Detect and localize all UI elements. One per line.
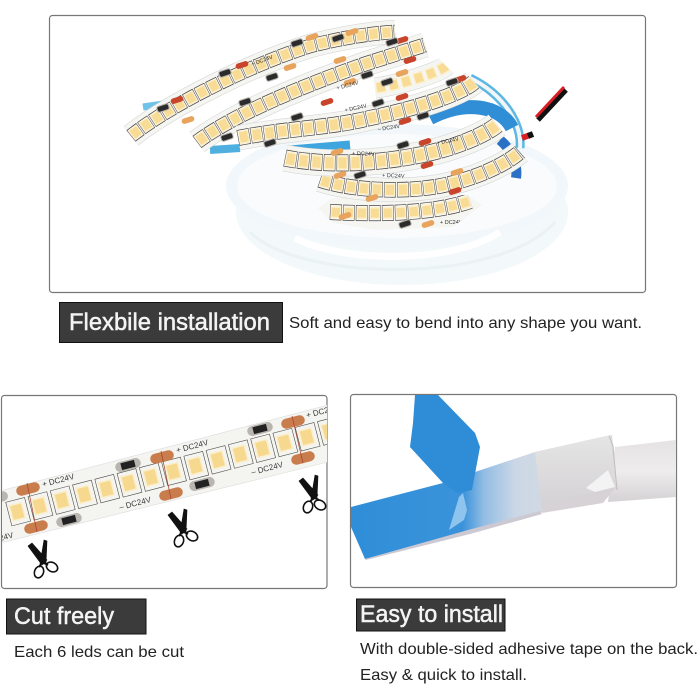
text: adhesive tape description xyxy=(360,641,698,684)
panel: LED strip reel photo xyxy=(50,16,646,292)
sleeve: clear protective wrap xyxy=(535,435,617,513)
strip: middle coil xyxy=(285,125,497,163)
strip: back coil xyxy=(375,66,446,88)
voltage labels: + DC24V xyxy=(175,438,210,455)
heading: Cut freely xyxy=(6,599,146,634)
tube: white strip right end xyxy=(608,440,676,502)
icon: scissors middle xyxy=(168,509,199,548)
voltage labels: – DC24V xyxy=(250,460,285,477)
strip: inner coil on the reel: + DC24V xyxy=(440,220,463,226)
solder pads and resistors on the reel strips: – DC24V xyxy=(377,124,401,133)
tape: strip with blue backing fading to white xyxy=(351,435,617,559)
solder pads and resistors on the reel strips: + DC24V xyxy=(352,151,375,158)
panel: cut freely photo xyxy=(0,396,340,588)
strip: lower coil xyxy=(320,152,520,190)
text: adhesive tape description: Easy & quick to install. xyxy=(360,667,527,684)
voltage labels: + DC24V xyxy=(305,403,340,420)
strip: second coil xyxy=(197,45,425,142)
solder pads and resistors on the reel strips: + DC24V xyxy=(336,80,360,92)
text: cut freely description: Each 6 leds can be cut xyxy=(14,644,185,661)
icon: scissors left xyxy=(28,540,59,579)
voltage labels: – DC24V xyxy=(118,495,153,512)
icon: scissors right xyxy=(299,475,327,514)
heading: Cut freely: Cut freely xyxy=(14,603,114,630)
strip: straight LED strip xyxy=(0,403,340,543)
solder pads and resistors on the reel strips: + DC24V xyxy=(382,173,405,180)
solder pads and resistors on the reel strips: + DC24V xyxy=(251,54,274,68)
tape: peeled blue flap xyxy=(410,395,480,530)
reel: translucent spool xyxy=(226,124,568,285)
strip: front coil xyxy=(238,82,474,138)
wires: red and black power leads xyxy=(522,87,566,138)
heading: Flexbile installation: Flexbile installation xyxy=(69,309,270,336)
cut lines xyxy=(27,416,303,532)
text: adhesive tape description: With double-sided adhesive tape on the back. xyxy=(360,641,698,658)
resistors xyxy=(0,421,274,528)
solder pads and resistors on the reel strips xyxy=(156,27,467,203)
voltage labels xyxy=(0,403,340,543)
blue backing loop xyxy=(143,78,520,178)
strip: top coil xyxy=(131,32,395,136)
solder pads and resistors on the reel strips: + DC24V xyxy=(344,103,368,114)
voltage labels: + DC24V xyxy=(41,472,76,489)
heading: Flexbile installation xyxy=(60,302,282,342)
panel: adhesive tape photo xyxy=(350,394,676,588)
heading: Easy to install: Easy to install xyxy=(360,601,503,628)
solder pads and resistors on the reel strips: + DC24V xyxy=(436,136,460,147)
strip: inner coil on the reel xyxy=(318,195,482,230)
solder pads xyxy=(15,414,316,535)
text: flexible installation description: Soft and easy to bend into any shape you want. xyxy=(289,315,642,332)
